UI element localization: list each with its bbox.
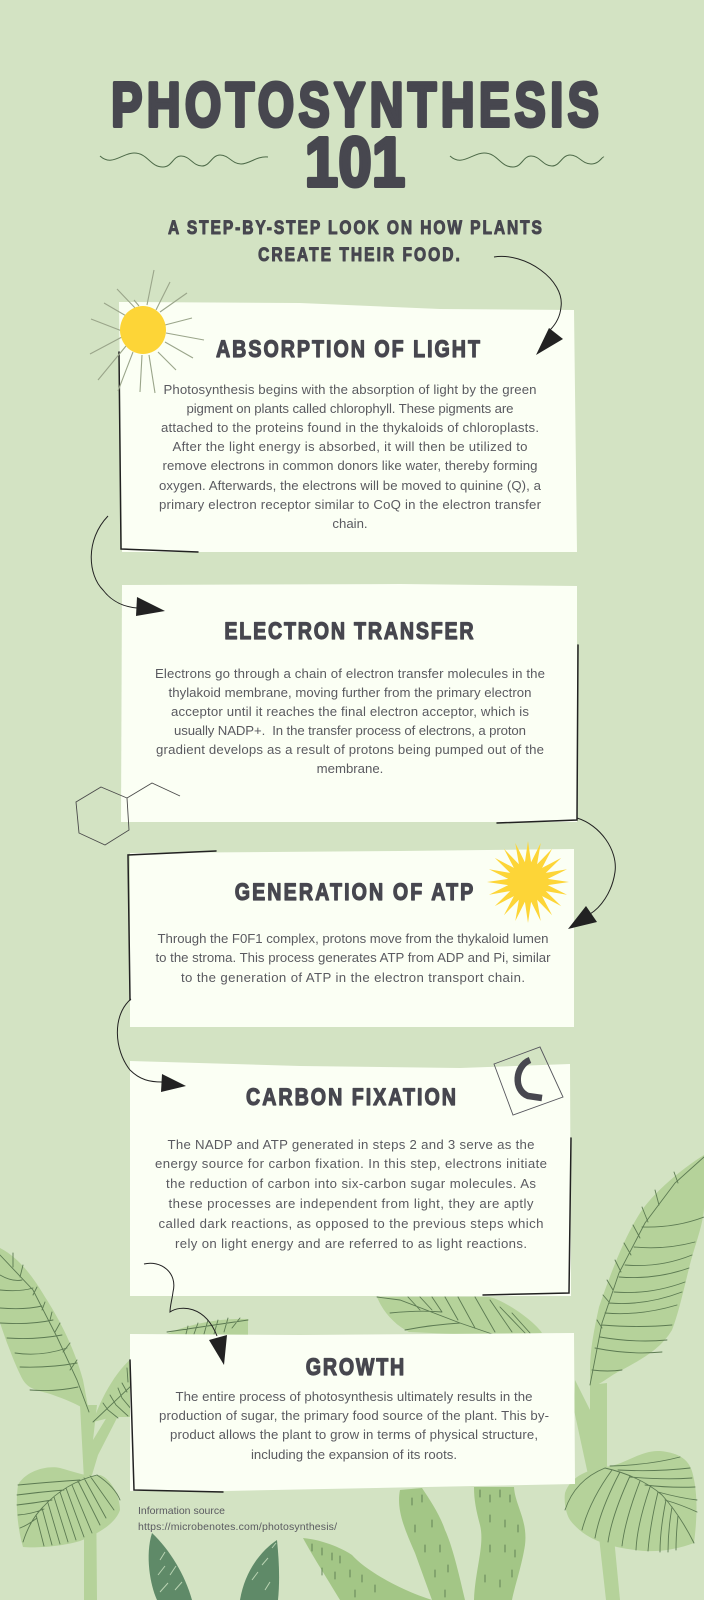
body text [155, 1137, 547, 1251]
body text: energy source for carbon fixation. In this step, electrons initiate [155, 1156, 547, 1171]
arrow: atp to carbon fixation [117, 999, 186, 1092]
heading: GENERATION OF ATP [235, 878, 473, 905]
right plant [565, 1155, 704, 1600]
subtitle [168, 217, 542, 265]
panel: carbon fixation [130, 1061, 571, 1296]
body text: membrane. [317, 761, 383, 776]
arrow: absorption to electron transfer [91, 516, 165, 616]
small leaf behind growth panel [167, 1318, 248, 1336]
body text: The entire process of photosynthesis ultimately results in the [176, 1389, 532, 1404]
heading: ELECTRON TRANSFER [224, 617, 474, 644]
body text [155, 666, 545, 776]
body text: the reduction of carbon into six-carbon sugar molecules. As [166, 1176, 536, 1191]
panel: generation of atp [128, 849, 574, 1027]
icon: starburst sun [487, 841, 569, 923]
panel border strokes [119, 352, 198, 552]
subtitle: A STEP-BY-STEP LOOK ON HOW PLANTS [168, 217, 542, 238]
arrow: carbon fixation to growth [144, 1263, 227, 1365]
centre leaf behind panels [377, 1297, 542, 1336]
body text: Photosynthesis begins with the absorption of light by the green [164, 382, 536, 397]
heading: CARBON FIXATION [246, 1083, 456, 1110]
body text [156, 931, 551, 985]
body text: thylakoid membrane, moving further from the primary electron [168, 685, 532, 700]
arrow: title to absorption [494, 256, 563, 355]
body text: to the stroma. This process generates ATP from ADP and Pi, similar [156, 950, 551, 965]
body text: rely on light energy and are referred to as light reactions. [175, 1236, 527, 1251]
panel border strokes [130, 1360, 223, 1492]
bottom dark leaves [149, 1533, 279, 1600]
information source [138, 1505, 337, 1533]
panel: growth [130, 1333, 575, 1492]
panel: absorption of light [119, 302, 577, 552]
title: 101 [305, 122, 405, 201]
body text: attached to the proteins found in the thykaloids of chloroplasts. [161, 420, 539, 435]
information source: https://microbenotes.com/photosynthesis/ [138, 1521, 337, 1533]
title [111, 69, 599, 201]
title: PHOTOSYNTHESIS [111, 69, 599, 140]
body text: production of sugar, the primary food source of the plant. This by- [159, 1408, 549, 1423]
panel: electron transfer [121, 584, 578, 823]
body text [159, 1389, 549, 1462]
body text: oxygen. Afterwards, the electrons will be moved to quinine (Q), a [159, 478, 542, 493]
icon: carbon element tile [494, 1047, 563, 1115]
body text: these processes are independent from light, they are aptly [168, 1196, 534, 1211]
heading: ABSORPTION OF LIGHT [216, 335, 481, 362]
body text: usually NADP+. In the transfer process of electrons, a proton [174, 723, 526, 738]
body text: product allows the plant to grow in terms of physical structure, [170, 1427, 538, 1442]
body text: pigment on plants called chlorophyll. These pigments are [186, 401, 514, 416]
body text: After the light energy is absorbed, it will then be utilized to [172, 439, 528, 454]
arrow: electron transfer to atp [568, 818, 615, 929]
left plant [0, 1248, 132, 1600]
body text: acceptor until it reaches the final electron acceptor, which is [171, 704, 529, 719]
bottom medium leaves [303, 1487, 525, 1600]
body text: chain. [332, 516, 368, 531]
information source: Information source [138, 1505, 225, 1517]
body text: Through the F0F1 complex, protons move from the thykaloid lumen [158, 931, 548, 946]
squiggle left [100, 153, 268, 167]
body text: remove electrons in common donors like water, thereby forming [162, 458, 538, 473]
body text: called dark reactions, as opposed to the previous steps which [158, 1216, 544, 1231]
subtitle: CREATE THEIR FOOD. [258, 244, 460, 265]
body text: to the generation of ATP in the electron transport chain. [181, 970, 525, 985]
body text: The NADP and ATP generated in steps 2 and 3 serve as the [168, 1137, 534, 1152]
icon: sun with rays [90, 270, 204, 393]
panel border strokes [483, 1138, 571, 1295]
squiggle right [450, 153, 604, 167]
body text [159, 382, 542, 531]
panel border strokes [128, 851, 216, 1000]
body text: primary electron receptor similar to CoQ in the electron transfer [159, 497, 542, 512]
icon: hexagon molecule [76, 783, 180, 845]
body text: including the expansion of its roots. [251, 1447, 457, 1462]
body text: gradient develops as a result of protons being pumped out of the [156, 742, 544, 757]
heading: GROWTH [306, 1353, 404, 1380]
body text: Electrons go through a chain of electron transfer molecules in the [155, 666, 545, 681]
panel border strokes [497, 645, 578, 823]
